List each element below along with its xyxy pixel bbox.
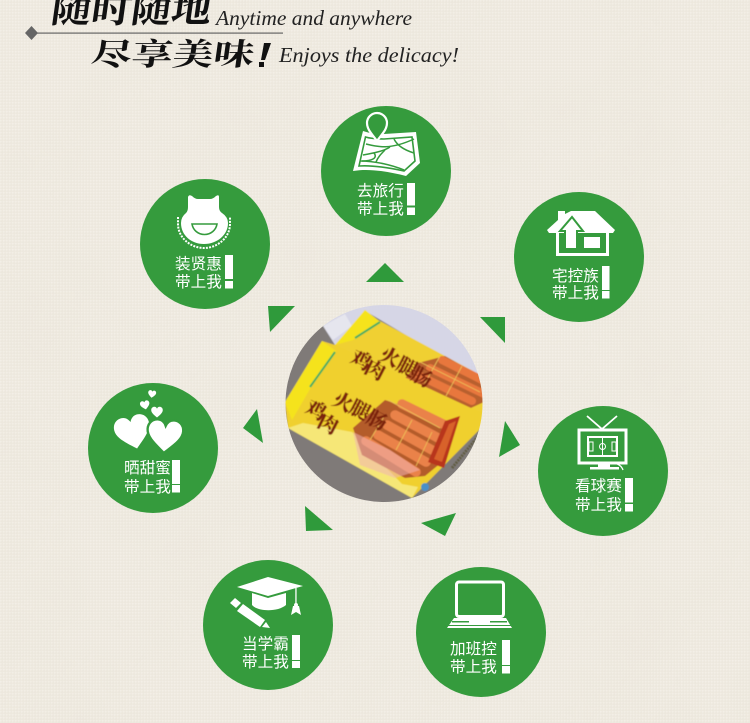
label: 带上我	[175, 273, 222, 291]
arrow: top right	[480, 317, 505, 343]
pack labels: 肉	[314, 410, 342, 439]
package window film	[353, 432, 420, 478]
icon: cap and pencil	[230, 577, 303, 628]
pack labels: 肠	[408, 363, 436, 392]
label: 加班控	[450, 640, 497, 658]
label: 晒甜蜜	[124, 458, 171, 477]
exclamation mark	[292, 635, 300, 668]
badge: hearts	[88, 383, 218, 513]
label: 去旅行	[357, 182, 404, 200]
label: 带上我	[242, 653, 289, 671]
badge: apron	[140, 179, 270, 309]
badge: laptop	[416, 567, 546, 697]
exclamation mark	[602, 266, 610, 298]
label: 当学霸	[242, 635, 289, 653]
label: 带上我	[552, 284, 599, 302]
front package net lines	[370, 400, 440, 466]
back package	[334, 310, 482, 414]
exclamation mark	[625, 478, 633, 512]
pack labels: 肉	[361, 356, 389, 385]
label: 带上我	[575, 496, 622, 514]
label: 带上我	[357, 200, 404, 218]
exclamation mark	[225, 255, 233, 288]
table cloth	[286, 314, 479, 502]
icon: laptop	[447, 582, 512, 628]
label: 带上我	[124, 478, 171, 496]
icon: TV with football pitch	[579, 416, 626, 470]
back package net lines	[420, 356, 480, 396]
exclamation mark	[502, 640, 510, 674]
arrow: bottom left	[305, 506, 333, 531]
title block	[25, 0, 459, 72]
english line two: Enjoys the delicacy!	[278, 43, 459, 67]
badge: television	[538, 406, 668, 536]
title divider with diamond	[25, 26, 283, 40]
central product photo	[286, 305, 482, 502]
label: 看球赛	[575, 476, 622, 495]
arrow: right	[499, 421, 520, 457]
exclamation mark	[172, 460, 180, 492]
front package	[285, 341, 484, 498]
english line one: Anytime and anywhere	[214, 6, 412, 30]
icon: hearts	[112, 390, 184, 454]
pack labels: 鸡	[302, 396, 330, 425]
arrow: bottom right	[421, 513, 456, 536]
icon: apron	[178, 195, 230, 248]
arrow triangles ring	[243, 263, 520, 536]
pack labels	[304, 346, 433, 436]
badge: travel	[321, 106, 451, 236]
heading exclamation	[259, 43, 271, 67]
arrow: top	[366, 263, 404, 282]
pack labels: 腿	[393, 353, 422, 383]
heading line two: 尽享美味	[89, 37, 257, 72]
blue mark	[421, 483, 429, 491]
pack fine print	[452, 434, 480, 468]
label: 带上我	[450, 658, 497, 676]
pack labels: 鸡	[347, 346, 375, 375]
label: 宅控族	[552, 267, 599, 285]
label: 装贤惠	[175, 255, 222, 273]
icon: house	[547, 211, 615, 256]
pack labels: 肠	[363, 406, 391, 435]
icon: map and pin	[353, 113, 420, 176]
arrow: left	[243, 409, 263, 443]
pack labels: 火	[376, 344, 403, 372]
arrow: top left	[268, 306, 295, 332]
exclamation mark	[407, 183, 415, 215]
badge: home	[514, 192, 644, 322]
pack labels: 腿	[346, 396, 375, 426]
badge: graduate	[203, 560, 333, 690]
pack labels: 火	[329, 389, 356, 417]
lavender backdrop	[323, 305, 478, 374]
red banner	[428, 416, 460, 468]
